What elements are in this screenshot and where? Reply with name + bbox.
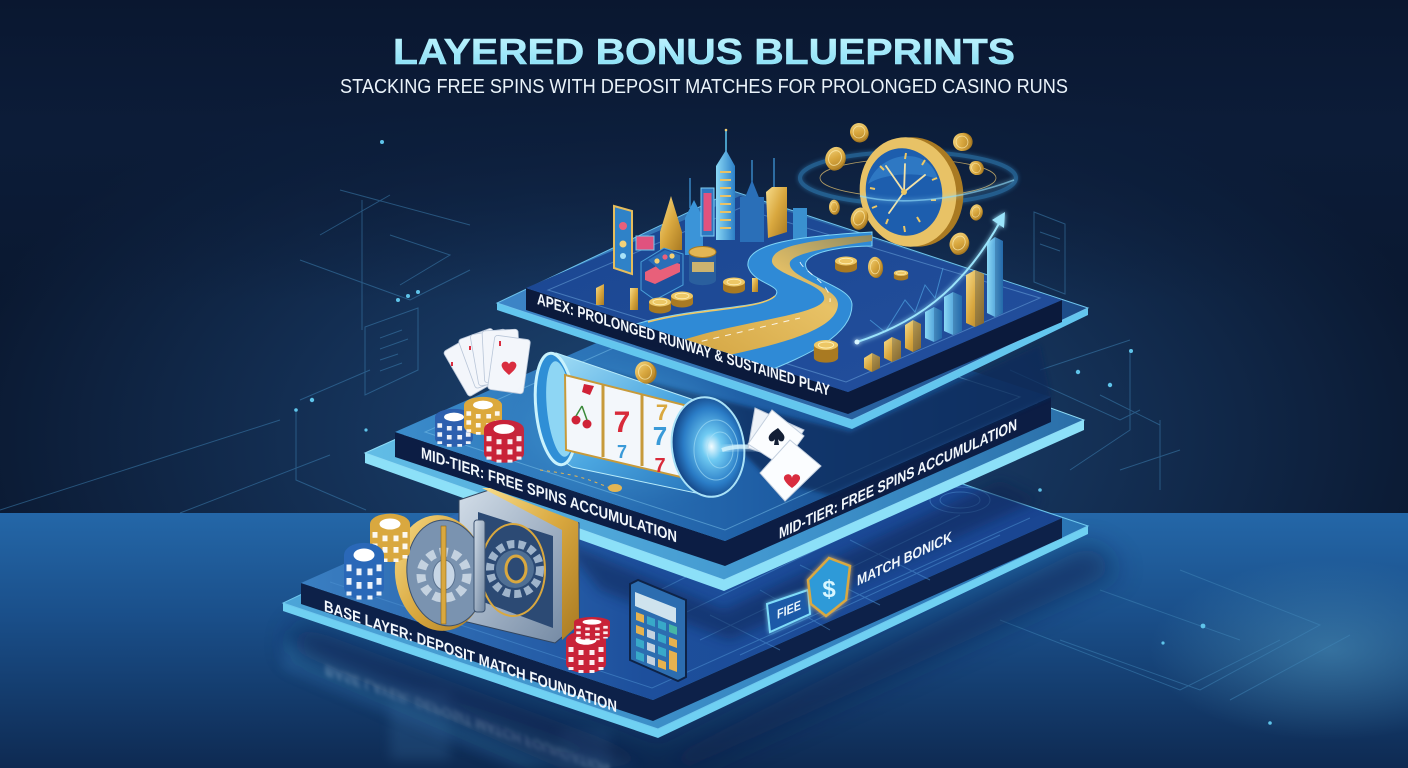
cherry <box>572 384 594 428</box>
back card <box>748 408 804 460</box>
door gear <box>421 552 467 598</box>
clock face sheen <box>868 156 938 184</box>
background: dark navy upper wall <box>0 0 1408 514</box>
subtitle: STACKING FREE SPINS WITH DEPOSIT MATCHES FOR PROLONGED CASINO RUNS <box>340 76 1068 98</box>
mid rim edge <box>365 420 1084 591</box>
icon: coins on apex surface <box>814 256 908 363</box>
end disc <box>665 392 751 502</box>
bar 2 <box>884 337 901 362</box>
top coin <box>635 361 657 384</box>
pile of coins <box>671 292 693 308</box>
shield <box>808 558 850 616</box>
mid label right: MID-TIER: FREE SPINS ACCUMULATION <box>779 415 1017 543</box>
floor shadow beneath base <box>290 545 1120 768</box>
apex inner border <box>548 208 1040 382</box>
mid inner border <box>425 300 1020 530</box>
vault gold edge <box>482 488 579 640</box>
distant blue blocks <box>740 180 807 248</box>
base rim top <box>283 400 1088 729</box>
road edge glow <box>648 296 775 322</box>
calculator keys <box>636 612 677 672</box>
inner gear <box>490 544 540 594</box>
icon: free tag and shield badge <box>767 558 850 632</box>
heart pip <box>784 474 800 488</box>
distant spires <box>690 158 774 208</box>
panel: base layer platform <box>283 400 1088 738</box>
pink sign tower <box>701 188 714 236</box>
background: dark top vignette <box>0 0 1408 300</box>
faint grid zig-zag <box>870 268 943 332</box>
circuit decoration left <box>0 190 470 513</box>
calculator screen <box>635 592 676 623</box>
icon: playing cards right <box>748 408 821 501</box>
seven gold: 7 <box>656 400 668 425</box>
gold lane <box>672 235 872 358</box>
gold tower <box>766 187 787 238</box>
icon: gold clock <box>850 128 1014 256</box>
icon: orbiting coins <box>821 119 986 258</box>
light streak <box>722 446 780 450</box>
vault frame <box>459 490 579 643</box>
left cap <box>530 351 582 467</box>
panel: mid-tier platform <box>365 288 1084 640</box>
floor reflection of the stack <box>283 640 640 768</box>
cylinder body <box>538 353 734 497</box>
base rim edge <box>283 526 1088 738</box>
stacked discs <box>723 278 745 294</box>
bar side shading <box>872 237 1003 372</box>
icon: red chips <box>566 617 610 673</box>
seven blue: 7 <box>653 421 667 451</box>
billboard <box>614 206 632 274</box>
seven red: 7 <box>614 406 630 439</box>
panel: apex platform <box>497 191 1088 429</box>
clock ticks <box>870 153 937 232</box>
ring front arc <box>860 180 1014 201</box>
vault opening <box>478 512 553 628</box>
reel window <box>565 375 685 478</box>
base surface circuit lines <box>330 480 1030 688</box>
seven red lower: 7 <box>654 455 666 477</box>
clock hub <box>901 189 907 195</box>
free tag <box>767 590 810 632</box>
left cap inner <box>542 360 578 458</box>
free text: FIEE <box>777 597 801 622</box>
bar 1 <box>864 353 880 372</box>
vault gold arc <box>481 524 545 616</box>
bar 3 <box>905 320 921 352</box>
base label: BASE LAYER: DEPOSIT MATCH FOUNDATION <box>324 597 617 716</box>
mid side band <box>395 397 1051 566</box>
base surface <box>301 401 1062 700</box>
trail coin <box>608 484 622 492</box>
apex rim top <box>497 191 1088 420</box>
gold pointed building <box>660 196 682 250</box>
clock hands <box>886 164 925 213</box>
barrel <box>689 246 716 285</box>
apex shadow on mid surface <box>560 345 1051 495</box>
reel symbols <box>572 384 668 477</box>
apex side band <box>526 288 1062 414</box>
small gold pillars <box>596 278 758 310</box>
floor glow patch <box>1150 560 1408 740</box>
background: reflective blue floor <box>0 513 1408 768</box>
bar 5 <box>944 292 962 335</box>
apex rim edge <box>497 303 1088 429</box>
mid surface <box>395 288 1051 541</box>
seven blue lower: 7 <box>617 442 627 462</box>
bar 4 <box>925 307 942 342</box>
base side band <box>301 518 1062 721</box>
vault door plate <box>402 516 490 630</box>
icon: winding runway road <box>630 232 872 372</box>
door gold bar <box>441 526 446 624</box>
reflection band <box>283 640 640 768</box>
mid shadow on base <box>560 480 1040 640</box>
mid rim top <box>365 291 1084 580</box>
reflected objects <box>390 690 610 768</box>
road dashes <box>690 262 830 344</box>
apex label: APEX: PROLONGED RUNWAY & SUSTAINED PLAY <box>537 290 830 400</box>
icon: poker chips mid tier <box>435 397 524 463</box>
icon: card fan <box>443 328 531 397</box>
title: LAYERED BONUS BLUEPRINTS <box>393 31 1015 72</box>
icon: neon city skyline <box>596 129 807 314</box>
icon: calculator <box>630 580 686 681</box>
bar chart: rising bars <box>854 212 1005 372</box>
tall glowing tower <box>716 129 735 240</box>
circuit decoration right <box>1000 212 1350 700</box>
end disc rings <box>694 420 738 480</box>
apex surface <box>526 196 1062 392</box>
door hub <box>433 560 455 590</box>
hinges <box>474 520 485 612</box>
heart card <box>760 440 821 501</box>
icon: orbit ring around clock <box>800 152 1016 204</box>
reel dividers <box>603 384 642 466</box>
spade pip <box>769 428 784 445</box>
pink sign <box>704 193 712 231</box>
card heart <box>502 362 516 375</box>
clock gold side <box>857 128 973 256</box>
road base <box>630 232 872 372</box>
slot station <box>636 236 683 300</box>
circuit nodes right <box>1038 349 1272 725</box>
blue tower <box>685 200 703 255</box>
clock gold rim <box>850 128 966 256</box>
icon: chips beside vault <box>344 514 410 600</box>
spark trail <box>540 470 610 488</box>
growth arrow <box>854 212 1005 344</box>
icon: vault <box>389 488 579 643</box>
bar 7 <box>987 237 1003 317</box>
icon: slot machine cylinder <box>530 351 780 502</box>
dollar sign: $ <box>822 576 836 603</box>
vault door <box>389 511 491 635</box>
spade card <box>748 410 804 466</box>
clock face <box>858 141 950 243</box>
circuit nodes left <box>294 140 420 432</box>
card pips <box>452 341 500 366</box>
cylinder glow <box>530 370 730 490</box>
lone coin pile <box>649 298 671 314</box>
mid label left: MID-TIER: FREE SPINS ACCUMULATION <box>421 444 677 546</box>
match bonus label: MATCH BONICK <box>857 529 952 590</box>
bar 6 <box>966 270 984 327</box>
